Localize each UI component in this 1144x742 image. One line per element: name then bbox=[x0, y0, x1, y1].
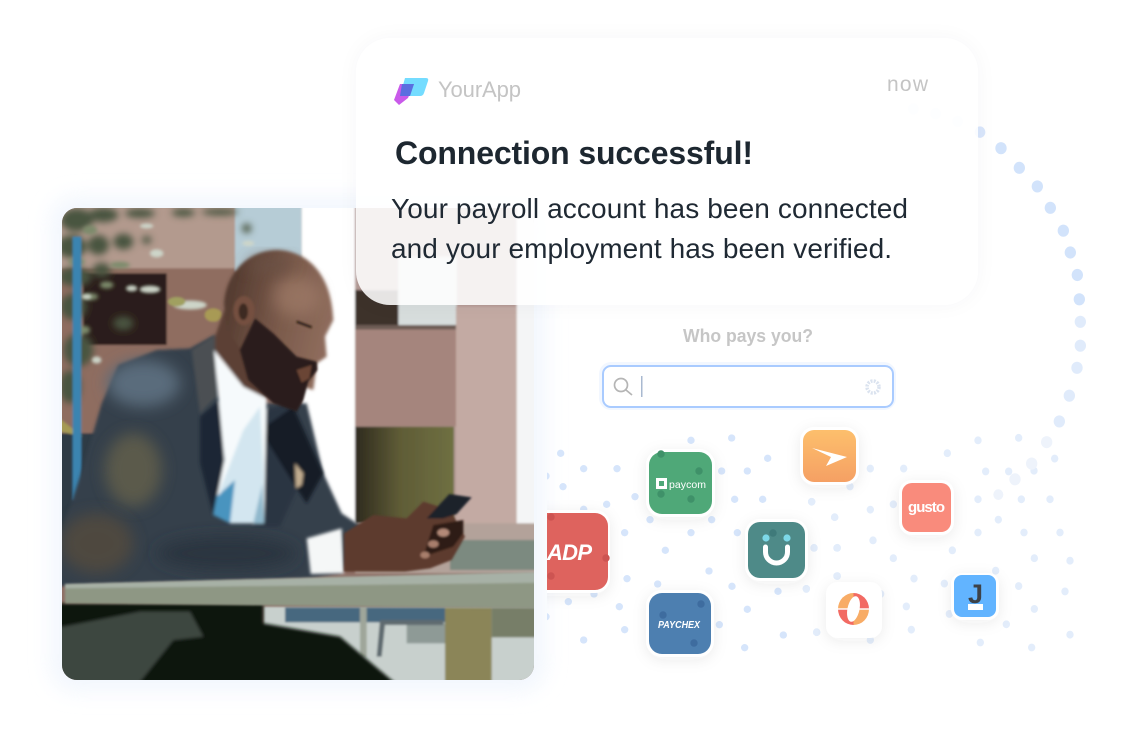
neck bbox=[215, 303, 267, 398]
right dots field bbox=[803, 434, 1074, 651]
title: Connection successful! bbox=[395, 135, 753, 171]
scene: photo, provider icons and dots bbox=[52, 126, 1086, 689]
eye bbox=[297, 322, 312, 327]
icon: J app bbox=[951, 573, 999, 620]
table bbox=[64, 582, 534, 608]
icon: Paycom bbox=[646, 449, 715, 517]
jacket shading bbox=[107, 360, 180, 407]
photo halo bbox=[50, 196, 546, 692]
pocket square bbox=[295, 463, 303, 488]
icon: Paychex bbox=[646, 590, 714, 657]
cuff bbox=[307, 528, 344, 574]
body text: Your payroll account has been connected bbox=[391, 193, 908, 224]
panel: connection notification card bbox=[356, 38, 978, 305]
app name: YourApp bbox=[438, 77, 521, 102]
body text bbox=[391, 193, 908, 264]
hands bbox=[344, 502, 465, 572]
beard bbox=[240, 318, 317, 412]
icon: YourApp logo bbox=[394, 78, 428, 105]
provider dots field bbox=[542, 434, 841, 651]
phone bbox=[427, 494, 472, 518]
icon: orange arrow bbox=[800, 427, 859, 485]
lower right background bbox=[263, 607, 547, 690]
heading: who pays you: Who pays you? bbox=[683, 326, 813, 346]
background building bbox=[62, 272, 168, 435]
icon: gusto bbox=[899, 480, 954, 535]
icon: magnifier bbox=[614, 378, 632, 395]
icon: ADP: ADP bbox=[546, 540, 592, 565]
dotted arc bbox=[908, 103, 1086, 500]
search box bbox=[599, 362, 896, 410]
icon: J app: J bbox=[968, 579, 983, 609]
icon: ADP bbox=[547, 510, 612, 598]
foliage bbox=[57, 208, 251, 403]
trousers and legs bbox=[62, 601, 396, 680]
body text: and your employment has been verified. bbox=[391, 233, 892, 264]
icon: circular logo bbox=[826, 582, 882, 638]
icon: gusto: gusto bbox=[908, 499, 945, 516]
head bbox=[224, 250, 333, 390]
icon: loading spinner bbox=[867, 381, 879, 393]
shirt and tie bbox=[213, 350, 267, 523]
photo: man checking phone at table bbox=[47, 197, 547, 691]
timestamp: now bbox=[887, 73, 929, 96]
blue pole bbox=[73, 237, 81, 500]
jacket bbox=[47, 335, 362, 587]
icon: Paychex: PAYCHEX bbox=[658, 619, 701, 631]
ear bbox=[233, 296, 255, 325]
icon: Paycom: paycom bbox=[669, 479, 706, 491]
icon: smile app bbox=[745, 519, 808, 581]
